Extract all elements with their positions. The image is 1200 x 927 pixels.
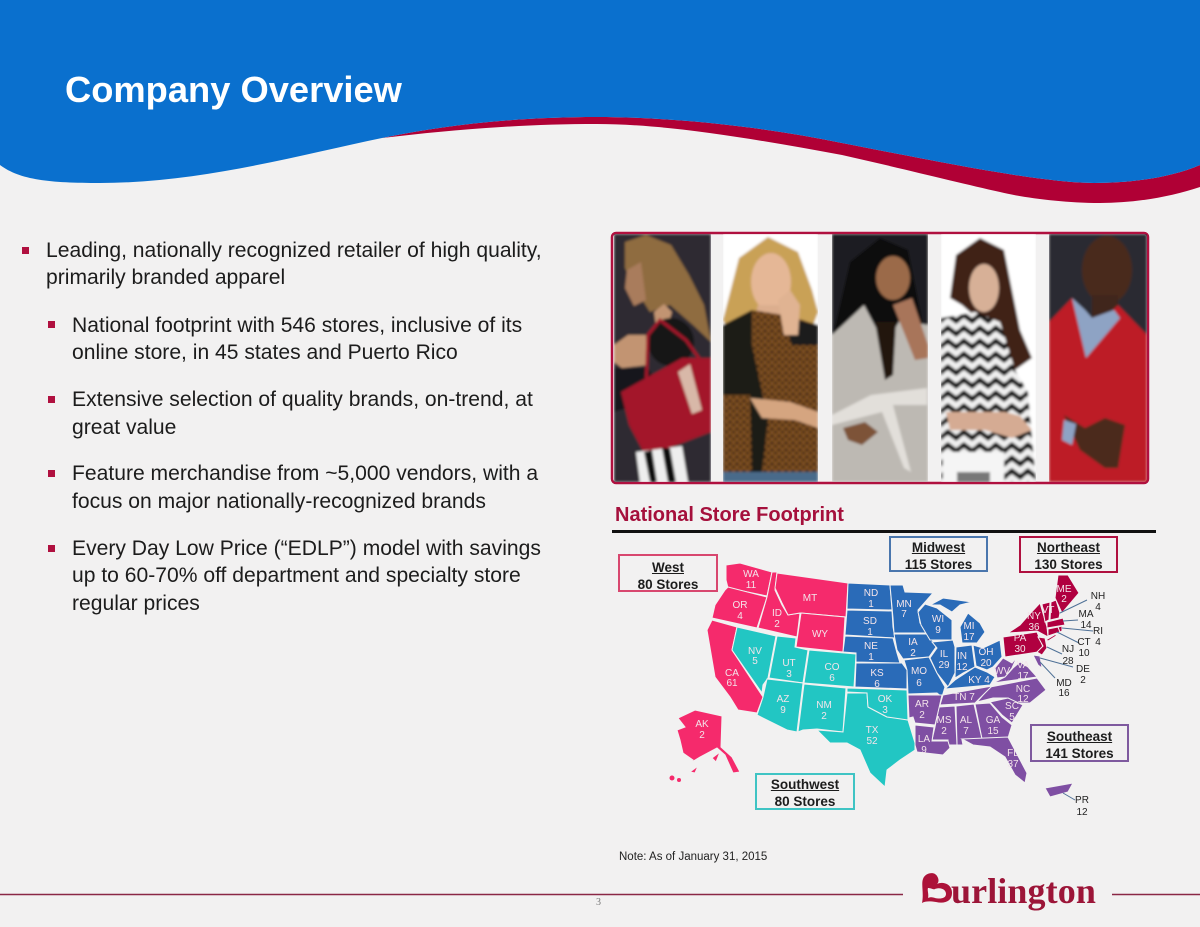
bullet: brands: [48, 388, 533, 439]
state labels on map: SC: [1005, 701, 1019, 712]
photo: woman in zigzag dress: [941, 234, 1036, 482]
leader lines: [1040, 600, 1093, 800]
state labels on map: 9: [780, 705, 786, 716]
region box: Midwest: Midwest: [912, 540, 965, 555]
callout state labels: NJ: [1062, 644, 1074, 655]
state labels on map: AK: [695, 719, 709, 730]
state labels on map: 1: [868, 652, 874, 663]
photo: woman in grey trench coat: [832, 234, 928, 482]
photo: blonde woman in leopard jacket: [723, 234, 818, 482]
state labels on map: 7: [963, 726, 969, 737]
bullet: vendors: [48, 462, 538, 513]
southwest region states: [732, 627, 915, 787]
state labels on map: IA: [908, 637, 918, 648]
state labels on map: 4: [737, 611, 743, 622]
Burlington logo: [922, 871, 1096, 911]
state labels on map: 2: [1061, 594, 1067, 605]
region box: Midwest: 115 Stores: [905, 557, 972, 572]
region box: Midwest: [889, 536, 988, 572]
state labels on map: LA: [918, 734, 930, 745]
wordmark: urlington: [951, 871, 1096, 911]
bullet: leading retailer: [22, 239, 542, 289]
state labels on map: 12: [956, 662, 968, 673]
callout state labels: MD: [1056, 678, 1072, 689]
bullet: EDLP: regular prices: [72, 592, 200, 615]
state labels on map: NM: [816, 700, 832, 711]
bullet: vendors: Feature merchandise from ~5,000 vendors, with a: [72, 462, 538, 485]
region box: Southwest: 80 Stores: [775, 794, 835, 809]
bullet: national footprint: online store, in 45 states and Puerto Rico: [72, 341, 458, 364]
state labels on map: 2: [919, 710, 925, 721]
state labels on map: 20: [980, 658, 992, 669]
state labels on map: 5: [1009, 712, 1015, 723]
state labels on map: 12: [1017, 694, 1029, 705]
callout state labels: PR: [1075, 795, 1089, 806]
photo strip: [0, 232, 1200, 896]
state labels on map: 61: [726, 678, 738, 689]
midwest region states: [843, 583, 1002, 697]
state labels on map: 29: [938, 660, 950, 671]
state labels on map: NC: [1016, 684, 1030, 695]
state labels on map: WI: [932, 614, 944, 625]
region box: West: 80 Stores: [638, 577, 698, 592]
callout state labels: 28: [1062, 656, 1074, 667]
state labels on map: CA: [725, 668, 739, 679]
bullet: brands: Extensive selection of quality brands, on-trend, at: [72, 388, 533, 411]
callout state labels: DE: [1076, 664, 1090, 675]
state labels on map: 7: [901, 609, 907, 620]
region box: Northeast: [1019, 536, 1118, 573]
state labels on map: 3: [786, 669, 792, 680]
state labels on map: MS: [936, 715, 952, 726]
southeast region states: [908, 655, 1073, 797]
photo frame: [612, 233, 1148, 483]
state labels on map: GA: [986, 715, 1001, 726]
state labels on map: ND: [864, 588, 878, 599]
bullet: vendors: focus on major nationally-recognized brands: [72, 490, 486, 513]
state labels on map: 52: [866, 736, 878, 747]
bullet: national footprint: [48, 314, 522, 364]
state labels on map: 6: [874, 679, 880, 690]
state labels on map: 3: [882, 705, 888, 716]
region box: Southwest: Southwest: [771, 777, 839, 792]
state labels on map: NV: [748, 646, 762, 657]
state labels on map: SD: [863, 616, 877, 627]
state labels on map: TN 7: [953, 692, 975, 703]
state labels on map: OH: [978, 647, 994, 658]
state labels on map: 2: [774, 619, 780, 630]
state labels on map: MI: [963, 621, 975, 632]
region box: West: West: [652, 560, 684, 575]
region box: Northeast: 130 Stores: [1034, 557, 1103, 572]
state labels on map: 2: [910, 648, 916, 659]
region box: Southeast: 141 Stores: [1045, 746, 1114, 761]
callout state labels: MA: [1078, 609, 1094, 620]
state labels on map: NE: [864, 641, 878, 652]
state labels on map: FL: [1007, 748, 1019, 759]
region box: West: [618, 554, 718, 592]
state labels on map: 5: [752, 656, 758, 667]
state labels on map: TX: [866, 725, 879, 736]
state labels on map: CO: [824, 662, 840, 673]
state labels on map: 17: [963, 632, 975, 643]
state labels on map: 15: [987, 726, 999, 737]
state labels on map: PA: [1014, 633, 1027, 644]
state labels on map: MT: [803, 593, 817, 604]
callout state labels: 10: [1078, 648, 1090, 659]
callout state labels: CT: [1077, 637, 1091, 648]
title: Company Overview: [65, 69, 402, 110]
footer rules: [0, 894, 1200, 896]
callout state labels: NH: [1091, 591, 1105, 602]
region box: Southeast: Southeast: [1047, 729, 1112, 744]
state labels on map: AZ: [777, 694, 789, 705]
page number: 3: [596, 897, 601, 908]
photo: woman with red handbag: [614, 234, 711, 482]
header wave band: [0, 0, 1200, 203]
state labels on map: 2: [821, 711, 827, 722]
callout state labels: 4: [1095, 637, 1101, 648]
bullet: leading retailer: Leading, nationally recognized retailer of high quality,: [46, 239, 542, 262]
state labels on map: WV: [994, 666, 1010, 677]
state labels on map: 1: [868, 599, 874, 610]
region box: Southeast: [1030, 724, 1129, 762]
state labels on map: 17: [1017, 671, 1029, 682]
section heading: National Store Footprint: [615, 504, 844, 526]
state labels on map: 30: [1014, 644, 1026, 655]
callout state labels: 2: [1080, 675, 1086, 686]
state labels on map: IL: [940, 649, 949, 660]
state labels on map: UT: [782, 658, 796, 669]
state labels on map: NY: [1027, 611, 1041, 622]
state labels on map: ME: [1056, 584, 1072, 595]
bullet: leading retailer: primarily branded apparel: [46, 266, 285, 289]
state labels on map: 9: [935, 625, 941, 636]
state labels on map: 9: [921, 745, 927, 756]
state labels on map: WY: [812, 629, 828, 640]
photo: man in red sweater: [1049, 234, 1147, 482]
callout state labels: [1056, 591, 1105, 818]
footnote: Note: As of January 31, 2015: [619, 851, 767, 863]
bullet: EDLP: [48, 537, 541, 615]
state labels on map: OK: [878, 694, 893, 705]
bullet: national footprint: National footprint with 546 stores, inclusive of its: [72, 314, 522, 337]
state labels on map: IN: [957, 651, 967, 662]
state labels on map: 2: [941, 726, 947, 737]
icon: heart B: [922, 873, 952, 903]
state labels on map: KS: [870, 668, 884, 679]
state labels on map: 6: [916, 678, 922, 689]
northeast region states: [1003, 575, 1079, 657]
west region states: [670, 563, 848, 782]
heading rule: [612, 530, 1156, 532]
state labels on map: MO: [911, 666, 927, 677]
callout state labels: 16: [1058, 688, 1070, 699]
state labels on map: 37: [1007, 759, 1019, 770]
state labels on map: MN: [896, 599, 912, 610]
state labels on map: [695, 569, 1072, 770]
state labels on map: 11: [746, 580, 757, 591]
bullet: brands: great value: [72, 416, 176, 439]
state labels on map: 36: [1028, 622, 1040, 633]
callout state labels: RI: [1093, 626, 1103, 637]
state labels on map: KY 4: [968, 675, 990, 686]
state labels on map: VA: [1017, 660, 1030, 671]
state labels on map: 2: [699, 730, 705, 741]
callout state labels: 4: [1095, 602, 1101, 613]
callout state labels: 12: [1076, 807, 1088, 818]
state labels on map: AL: [960, 715, 973, 726]
region box: Northeast: Northeast: [1037, 540, 1100, 555]
state labels on map: ID: [772, 608, 782, 619]
bullet list: [22, 239, 542, 615]
callout state labels: 14: [1080, 620, 1092, 631]
region box: Southwest: [755, 773, 855, 810]
state labels on map: 6: [829, 673, 835, 684]
state labels on map: OR: [732, 600, 748, 611]
bullet: EDLP: Every Day Low Price (“EDLP”) model with savings: [72, 537, 541, 560]
state labels on map: VT: [1042, 605, 1054, 616]
state labels on map: 1: [867, 627, 873, 638]
state labels on map: AR: [915, 699, 929, 710]
bullet: EDLP: up to 60-70% off department and specialty store: [72, 564, 521, 587]
state labels on map: WA: [743, 569, 759, 580]
